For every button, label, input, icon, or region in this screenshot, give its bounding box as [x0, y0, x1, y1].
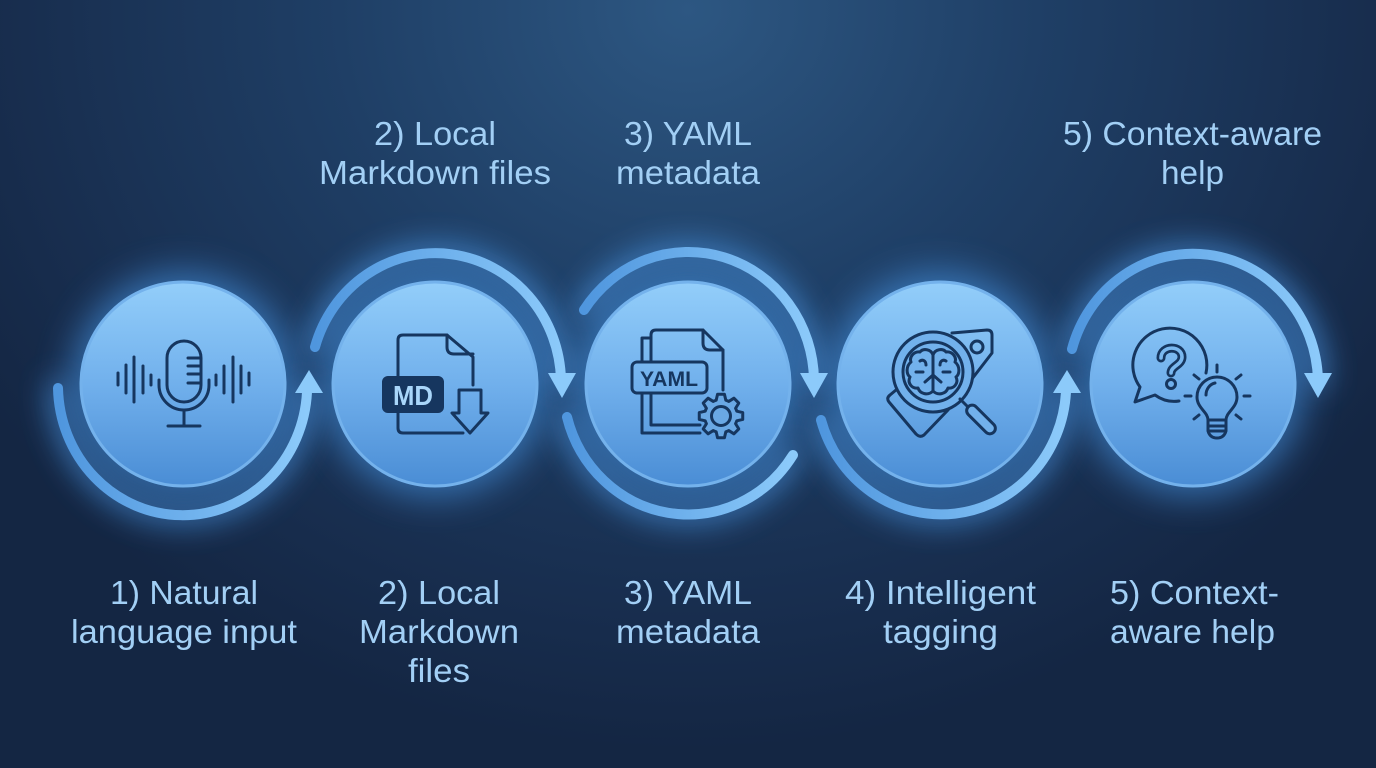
icon: question bubble and light bulb	[1133, 328, 1250, 438]
heading: top label step 5: 5) Context-aware	[1063, 115, 1322, 152]
heading: top label step 2: Markdown files	[319, 154, 551, 191]
step 2 circle	[333, 282, 537, 486]
heading: top label step 3: 3) YAML	[624, 115, 752, 152]
icon: microphone with sound waves	[118, 341, 249, 426]
step 4 circle	[838, 282, 1042, 486]
label: step 4: 4) Intelligent	[845, 574, 1036, 611]
heading: top label step 3: metadata	[616, 154, 761, 191]
arrow: step 1 to 2	[58, 370, 323, 515]
label: step 4: tagging	[883, 613, 998, 650]
icon: yaml file with gear: YAML	[640, 368, 698, 391]
arrow: top arc over step 2	[315, 253, 576, 398]
arrow: top arc over step 3	[584, 252, 828, 398]
icon: brain in magnifier over tag	[888, 330, 998, 436]
arc: below step 3	[567, 417, 793, 514]
arrow: top arc over step 5	[1072, 254, 1332, 398]
glow halos	[58, 252, 1318, 515]
label: step 5	[1110, 574, 1279, 650]
label: step 5: 5) Context-	[1110, 574, 1279, 611]
step 3 circle	[586, 282, 790, 486]
heading: top label step 3	[616, 115, 761, 191]
heading: top label step 2: 2) Local	[374, 115, 496, 152]
step 5 circle	[1091, 282, 1295, 486]
label: step 1: language input	[71, 613, 297, 650]
heading: top label step 5	[1063, 115, 1322, 191]
label: step 2: 2) Local	[378, 574, 500, 611]
icon: yaml file with gear	[632, 330, 743, 438]
label: step 2: files	[408, 652, 470, 689]
label: step 1: 1) Natural	[110, 574, 258, 611]
label: step 4	[845, 574, 1036, 650]
label: step 3: metadata	[616, 613, 761, 650]
icon: markdown file download: MD	[393, 380, 433, 411]
label: step 5: aware help	[1110, 613, 1275, 650]
label: step 3: 3) YAML	[624, 574, 752, 611]
icon: markdown file download	[382, 335, 488, 433]
label: step 3	[616, 574, 761, 650]
label: step 2	[359, 574, 519, 689]
arrow: bottom arc under step 4	[821, 370, 1081, 514]
heading: top label step 5: help	[1161, 154, 1224, 191]
label: step 1	[71, 574, 297, 650]
label: step 2: Markdown	[359, 613, 519, 650]
heading: top label step 2	[319, 115, 551, 191]
step 1 circle	[81, 282, 285, 486]
